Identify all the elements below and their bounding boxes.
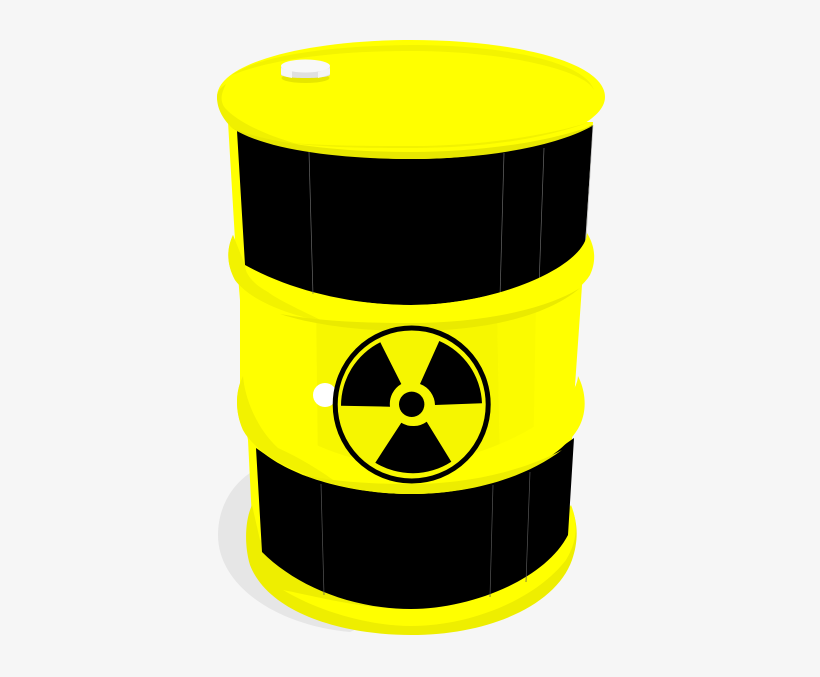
middle band shading — [316, 300, 500, 470]
lid outer rim — [217, 40, 605, 159]
blade top right — [420, 341, 482, 405]
symbol outer ring — [335, 328, 488, 481]
barrel body — [228, 122, 593, 620]
white reflection dot — [313, 383, 337, 407]
upper panel seams — [309, 125, 593, 297]
bottom rim — [246, 505, 577, 635]
blade bottom — [375, 422, 451, 473]
blade top left — [341, 342, 401, 407]
symbol centre — [399, 392, 424, 417]
lower panel seams — [321, 472, 530, 597]
lid rim left shading — [217, 84, 330, 152]
middle rib — [237, 376, 585, 494]
barrel shadow on the ground — [218, 473, 420, 632]
lid rim lower shadow — [232, 125, 594, 159]
upper black panel — [237, 125, 593, 305]
lower black panel — [256, 438, 574, 609]
lid groove — [232, 45, 594, 90]
lid — [217, 40, 605, 159]
radiation symbol — [335, 328, 488, 481]
lid cap — [281, 60, 330, 83]
upper rib — [228, 233, 594, 331]
